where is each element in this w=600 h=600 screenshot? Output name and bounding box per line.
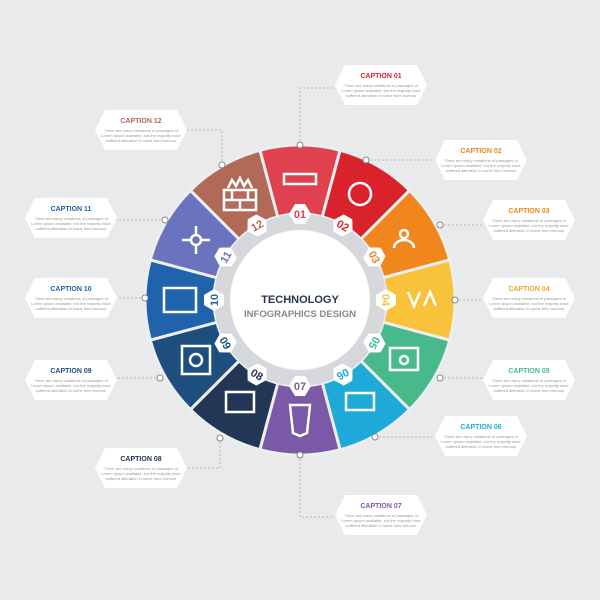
captions: CAPTION 10 bbox=[50, 286, 92, 293]
captions: suffered alteration in some form humour bbox=[494, 388, 565, 393]
captions: There are many variations of passages of bbox=[492, 296, 567, 301]
captions: CAPTION 06 bbox=[460, 424, 502, 431]
number badges: 04 bbox=[379, 294, 391, 307]
icons bbox=[164, 174, 436, 436]
captions: suffered alteration in some form humour bbox=[36, 306, 107, 311]
captions: There are many variations of passages of bbox=[104, 466, 179, 471]
captions: suffered alteration in some form humour bbox=[494, 228, 565, 233]
captions: Lorem Ipsum available, but the majority have bbox=[489, 383, 570, 388]
number badges: 06 bbox=[334, 365, 351, 382]
captions: suffered alteration in some form humour bbox=[346, 523, 417, 528]
captions: CAPTION 04 bbox=[508, 286, 550, 293]
number badges: 03 bbox=[365, 249, 382, 266]
number badges: 01 bbox=[294, 209, 306, 221]
captions: Lorem Ipsum available, but the majority have bbox=[31, 301, 112, 306]
captions: CAPTION 12 bbox=[120, 118, 162, 125]
captions: Lorem Ipsum available, but the majority have bbox=[489, 223, 570, 228]
center circle: INFOGRAPHICS DESIGN bbox=[244, 309, 356, 320]
number badges: 02 bbox=[334, 218, 351, 235]
connector dots bbox=[142, 142, 458, 458]
captions: suffered alteration in some form humour bbox=[494, 306, 565, 311]
captions: CAPTION 07 bbox=[360, 503, 402, 510]
captions: CAPTION 09 bbox=[50, 368, 92, 375]
captions: There are many variations of passages of bbox=[444, 434, 519, 439]
captions: CAPTION 01 bbox=[360, 73, 402, 80]
captions: Lorem Ipsum available, but the majority have bbox=[31, 221, 112, 226]
number badges: 05 bbox=[365, 334, 382, 351]
captions: There are many variations of passages of bbox=[344, 83, 419, 88]
captions: CAPTION 02 bbox=[460, 148, 502, 155]
captions: suffered alteration in some form humour bbox=[36, 226, 107, 231]
captions: suffered alteration in some form humour bbox=[36, 388, 107, 393]
captions: There are many variations of passages of bbox=[104, 128, 179, 133]
number badges: 08 bbox=[248, 367, 265, 384]
number badges: 07 bbox=[294, 381, 306, 393]
captions: suffered alteration in some form humour bbox=[346, 93, 417, 98]
center circle bbox=[214, 214, 386, 386]
captions: Lorem Ipsum available, but the majority have bbox=[101, 471, 182, 476]
captions: There are many variations of passages of bbox=[344, 513, 419, 518]
captions: There are many variations of passages of bbox=[492, 378, 567, 383]
number badges: 11 bbox=[218, 249, 234, 266]
captions: There are many variations of passages of bbox=[34, 296, 109, 301]
wheel segments bbox=[145, 145, 455, 455]
captions: There are many variations of passages of bbox=[34, 216, 109, 221]
number badges: 10 bbox=[209, 294, 221, 306]
captions: CAPTION 08 bbox=[120, 456, 162, 463]
captions: Lorem Ipsum available, but the majority have bbox=[441, 439, 522, 444]
captions: Lorem Ipsum available, but the majority have bbox=[101, 133, 182, 138]
captions: suffered alteration in some form humour bbox=[446, 444, 517, 449]
captions: Lorem Ipsum available, but the majority have bbox=[341, 518, 422, 523]
captions: There are many variations of passages of bbox=[492, 218, 567, 223]
captions: suffered alteration in some form humour bbox=[106, 138, 177, 143]
captions: CAPTION 03 bbox=[508, 208, 550, 215]
captions: Lorem Ipsum available, but the majority have bbox=[341, 88, 422, 93]
captions: suffered alteration in some form humour bbox=[106, 476, 177, 481]
connector lines bbox=[115, 88, 483, 517]
captions: CAPTION 05 bbox=[508, 368, 550, 375]
captions: There are many variations of passages of bbox=[34, 378, 109, 383]
captions: Lorem Ipsum available, but the majority have bbox=[489, 301, 570, 306]
center circle: TECHNOLOGY bbox=[261, 294, 339, 306]
number badges: 12 bbox=[249, 218, 266, 235]
captions: suffered alteration in some form humour bbox=[446, 168, 517, 173]
captions: Lorem Ipsum available, but the majority have bbox=[441, 163, 522, 168]
captions: CAPTION 11 bbox=[51, 206, 92, 213]
captions bbox=[25, 65, 575, 535]
number badges bbox=[204, 204, 396, 396]
captions: Lorem Ipsum available, but the majority have bbox=[31, 383, 112, 388]
captions: There are many variations of passages of bbox=[444, 158, 519, 163]
number badges: 09 bbox=[216, 335, 233, 352]
